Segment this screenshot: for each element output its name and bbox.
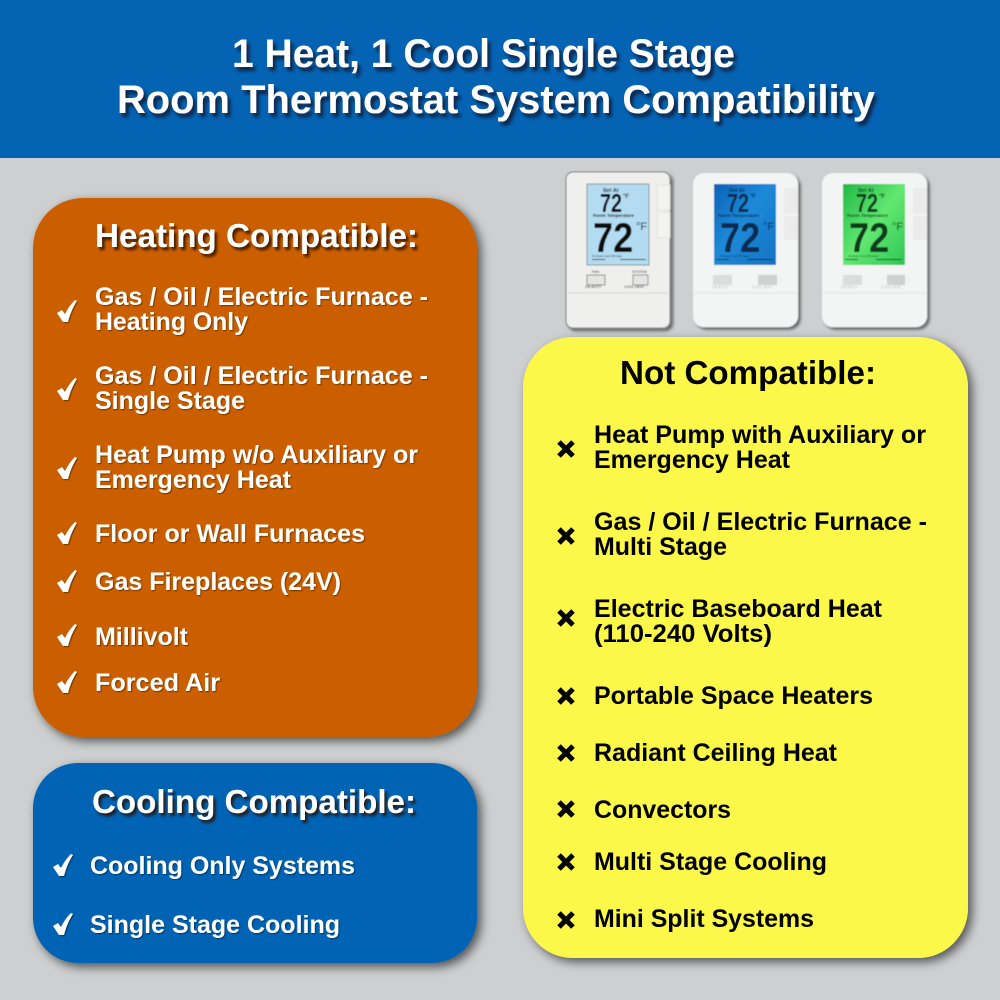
item: furnace single stage: Gas / Oil / Electric Furnace - (95, 362, 428, 390)
item: heat pump: Emergency Heat (95, 466, 292, 494)
thermostat: white backlight: Room Temperature (593, 213, 634, 218)
item: mini split systems: Mini Split Systems (594, 905, 814, 933)
item: electric baseboard heat: (110-240 Volts) (594, 620, 772, 648)
panel: heating compatible (33, 198, 477, 737)
thermostat: green backlight: 72 (849, 216, 889, 262)
item: millivolt: Millivolt (95, 623, 189, 651)
thermostat: white backlight: On Auto Cool Off Heat (592, 254, 622, 258)
item: portable space heaters: Portable Space Heaters (594, 682, 873, 710)
thermostat: green backlight: COOL HEAT (881, 285, 902, 289)
item: furnace heating only: Gas / Oil / Electric Furnace - (95, 283, 428, 311)
item: furnace single stage (57, 362, 428, 415)
thermostat: blue backlight: °F (763, 221, 774, 233)
heading: not compatible: Not Compatible: (620, 354, 876, 391)
thermostat: white backlight: °F (636, 221, 647, 233)
thermostat: green backlight: ON AUTO (841, 285, 857, 289)
thermostat: white backlight: 72 (600, 188, 622, 218)
item: furnace single stage: Single Stage (95, 387, 245, 415)
item: furnace multi stage: Gas / Oil / Electric Furnace - (594, 508, 927, 536)
item: cooling only systems: Cooling Only Systems (90, 852, 355, 880)
thermostat: white backlight: SYSTEM (632, 270, 647, 274)
item: forced air: Forced Air (95, 669, 220, 697)
thermostat: blue backlight: Set At (729, 188, 745, 194)
panel: not compatible (523, 337, 968, 958)
item: heat pump (57, 441, 418, 494)
title: 1 Heat, 1 Cool Single Stage (232, 32, 735, 76)
thermostat: green backlight: Set At (858, 188, 874, 194)
cooling list (53, 852, 355, 939)
item: furnace heating only (57, 283, 428, 336)
thermostat: green backlight: °F (879, 194, 885, 200)
item: multi stage cooling: Multi Stage Cooling (594, 848, 827, 876)
thermostat: blue backlight: 72 (727, 188, 749, 218)
thermostat: white backlight (566, 172, 670, 328)
item: furnace multi stage: Multi Stage (594, 533, 727, 561)
item: heat pump: Heat Pump w/o Auxiliary or (95, 441, 418, 469)
thermostat: white backlight: FAN (592, 270, 599, 274)
item: radiant ceiling heat: Radiant Ceiling Heat (594, 739, 838, 767)
thermostat: green backlight: °F (892, 221, 903, 233)
item: gas fireplaces: Gas Fireplaces (24V) (95, 568, 341, 596)
thermostat: blue backlight: COOL HEAT (752, 285, 773, 289)
thermostat: white backlight: ON AUTO (585, 285, 601, 289)
item: single stage cooling: Single Stage Cooling (90, 911, 340, 939)
item: convectors: Convectors (594, 796, 731, 824)
panel: cooling compatible (33, 763, 477, 963)
item: heat pump with auxiliary (559, 421, 926, 474)
thermostat: green backlight: On Auto Cool Off Heat (848, 254, 878, 258)
thermostat: blue backlight: °F (750, 194, 756, 200)
thermostat: white backlight: Set At (603, 188, 619, 194)
thermostat: white backlight: 72 (593, 216, 633, 262)
heating list (57, 283, 428, 697)
heading: cooling compatible: Cooling Compatible: (92, 783, 416, 820)
thermostat: blue backlight: 72 (720, 216, 760, 262)
thermostat: blue backlight: ON AUTO (712, 285, 728, 289)
item: heat pump with auxiliary: Emergency Heat (594, 446, 791, 474)
thermostat: blue backlight: Room Temperature (718, 213, 759, 218)
not compatible list (559, 421, 927, 933)
thermostat: blue backlight (693, 173, 798, 327)
item: furnace heating only: Heating Only (95, 308, 248, 336)
thermostat: green backlight: Room Temperature (847, 213, 888, 218)
thermostat: green backlight (822, 173, 927, 327)
item: floor or wall furnaces: Floor or Wall Furnaces (95, 520, 365, 548)
thermostat: green backlight: 72 (856, 188, 878, 218)
item: furnace multi stage (559, 508, 927, 561)
thermostat: white backlight: COOL HEAT (624, 285, 645, 289)
title: Room Thermostat System Compatibility (117, 78, 875, 122)
item: electric baseboard heat: Electric Baseboard Heat (594, 595, 883, 623)
item: electric baseboard heat (559, 595, 883, 648)
item: heat pump with auxiliary: Heat Pump with Auxiliary or (594, 421, 926, 449)
heading: heating compatible: Heating Compatible: (95, 217, 418, 254)
thermostat: white backlight: °F (623, 194, 629, 200)
title (117, 32, 875, 122)
header band (0, 0, 1000, 158)
thermostat: blue backlight: On Auto Cool Off Heat (719, 254, 749, 258)
